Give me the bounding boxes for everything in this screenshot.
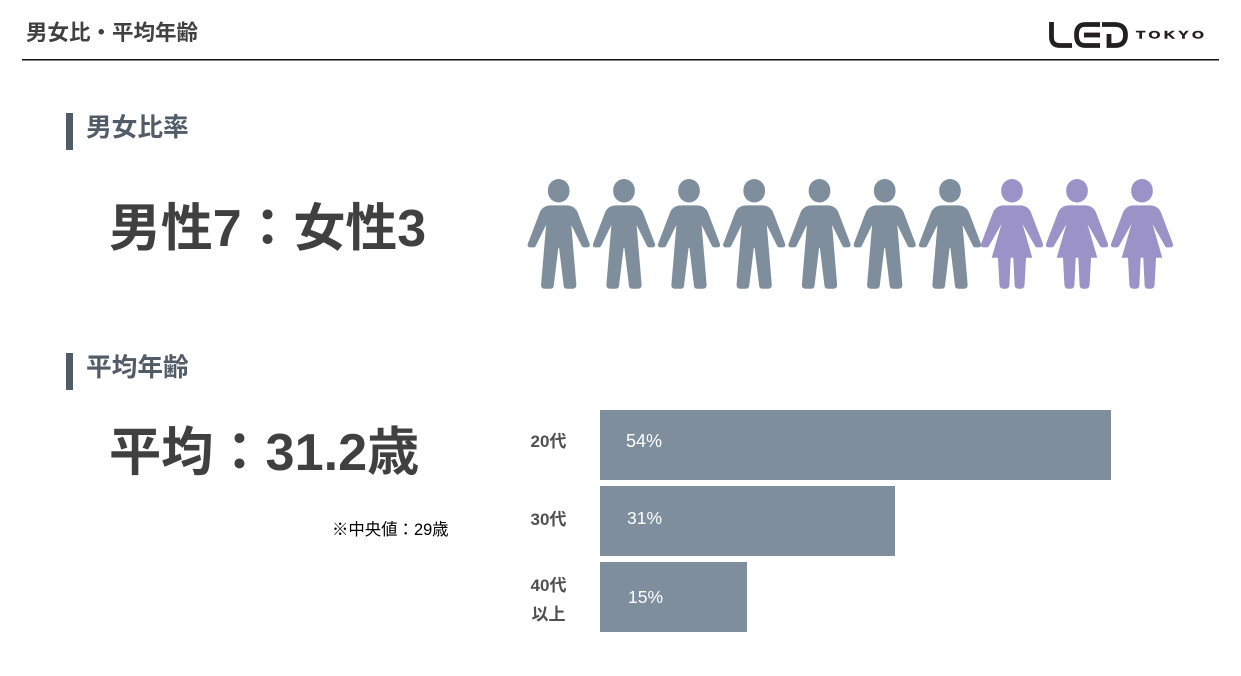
bar chart: age distribution	[530, 410, 1111, 632]
header rule	[22, 59, 1219, 60]
bar 20s 54%: 54%	[626, 431, 662, 451]
bar 30s 31%	[600, 486, 895, 556]
title: 男女比・平均年齢	[26, 21, 198, 45]
label 40s and over: 以上	[532, 604, 566, 624]
average age statement: 平均：31.2歳	[109, 424, 419, 482]
gender ratio statement: 男性7：女性3	[109, 199, 426, 257]
heading: gender ratio: 男女比率	[86, 114, 189, 142]
label 40s and over: 40代	[531, 576, 566, 595]
bar 40s 15%	[600, 562, 747, 632]
heading: gender ratio	[66, 113, 189, 150]
bar 40s 15%: 15%	[628, 587, 663, 607]
label 30s: 30代	[530, 510, 566, 529]
bar 20s 54%	[600, 410, 1111, 480]
heading: average age: 平均年齢	[86, 354, 189, 382]
label 20s: 20代	[530, 432, 566, 451]
heading: average age	[66, 353, 189, 390]
logo: LED TOKYO: TOKYO	[1136, 29, 1207, 41]
logo: LED TOKYO	[1049, 22, 1207, 48]
bar 30s 31%: 31%	[627, 508, 662, 528]
median note: ※中央値：29歳	[332, 521, 449, 539]
label 40s and over	[530, 576, 566, 624]
pictogram: 7 men and 3 women	[528, 179, 1174, 289]
